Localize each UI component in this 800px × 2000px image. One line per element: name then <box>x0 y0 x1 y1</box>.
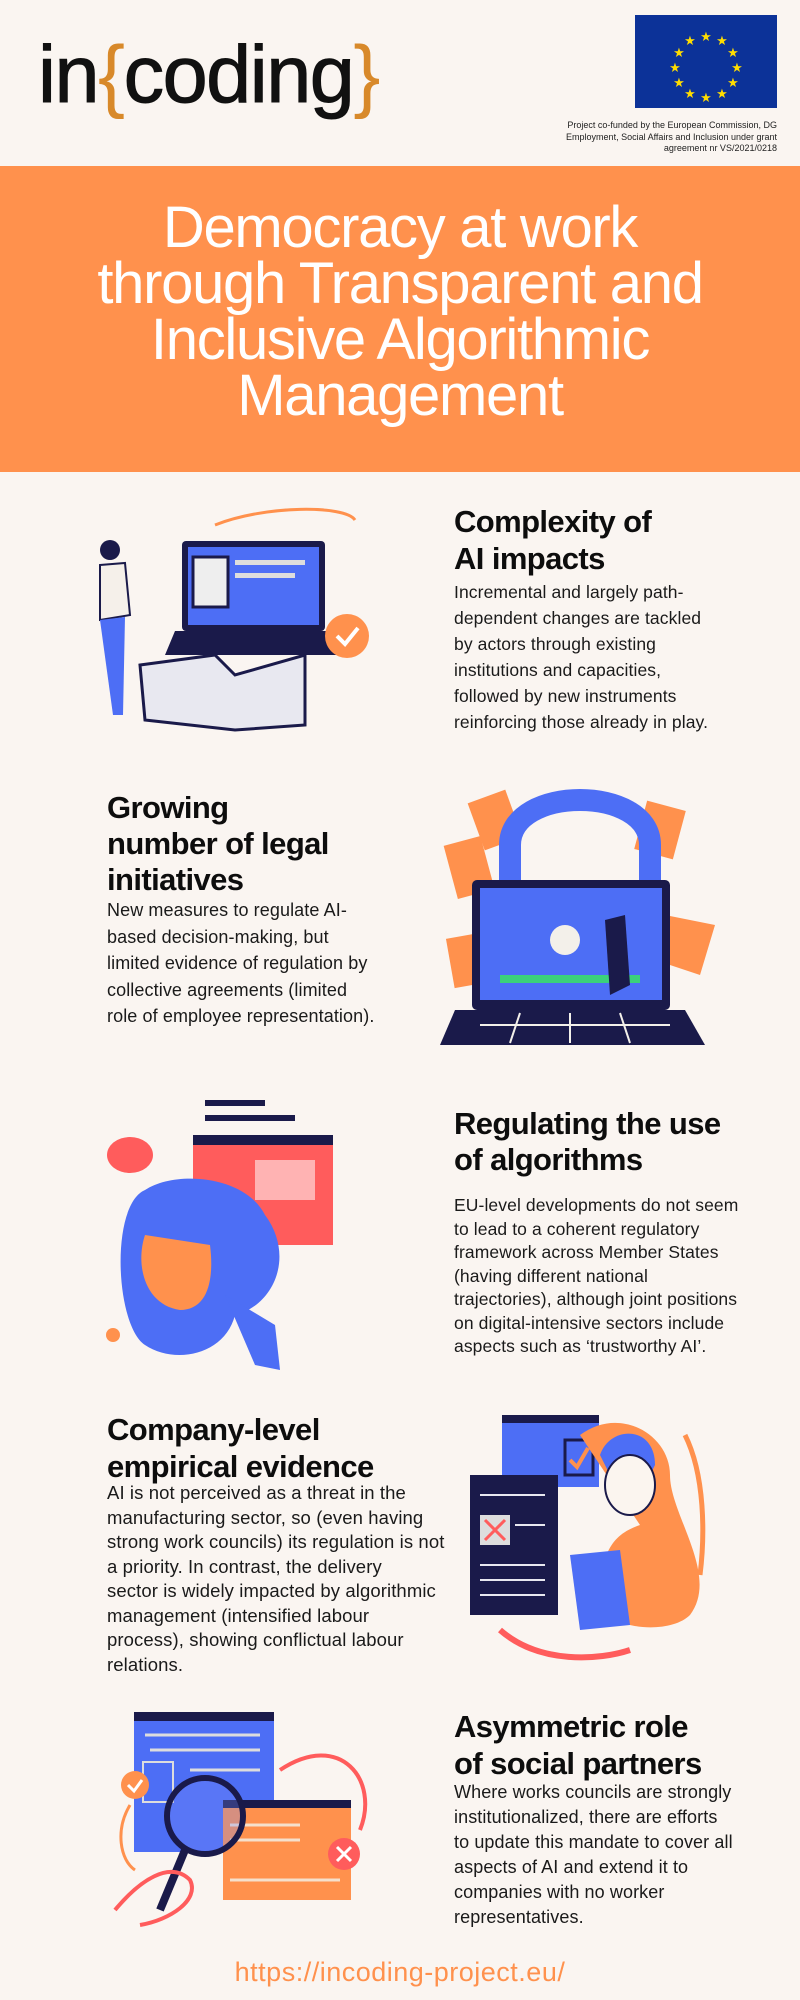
text block <box>454 1195 738 1356</box>
text block: aspects such as ‘trustworthy AI’. <box>454 1336 706 1356</box>
heading: Company-level <box>107 1412 320 1447</box>
title: Inclusive Algorithmic <box>151 307 649 372</box>
icon: EU flag: ★ <box>700 91 712 106</box>
text block: to update this mandate to cover all <box>454 1832 733 1852</box>
icon: EU flag: ★ <box>669 61 681 76</box>
illustration: padlock laptop <box>440 789 715 1045</box>
heading: Growing <box>107 790 229 825</box>
heading: of social partners <box>454 1746 702 1781</box>
icon: EU flag: ★ <box>684 34 696 49</box>
header <box>0 0 800 166</box>
text block: aspects of AI and extend it to <box>454 1857 688 1877</box>
text block: management (intensified labour <box>107 1604 369 1626</box>
heading <box>454 1106 721 1177</box>
text block: institutions and capacities, <box>454 660 661 680</box>
title <box>97 195 703 428</box>
text block: limited evidence of regulation by <box>107 953 367 973</box>
panel: legal initiatives <box>107 789 715 1045</box>
text block: reinforcing those already in play. <box>454 712 708 732</box>
icon: EU flag: ★ <box>716 87 728 102</box>
panel: regulating algorithms <box>106 1100 738 1370</box>
text block: institutionalized, there are efforts <box>454 1807 717 1827</box>
title banner <box>0 166 800 472</box>
text block: framework across Member States <box>454 1242 719 1262</box>
heading <box>107 1412 374 1484</box>
icon: EU flag: ★ <box>731 61 743 76</box>
heading <box>454 504 652 576</box>
text block: companies with no worker <box>454 1882 664 1902</box>
text block <box>107 1482 444 1674</box>
text block: New measures to regulate AI- <box>107 900 347 920</box>
heading <box>454 1709 702 1781</box>
text block: dependent changes are tackled <box>454 608 701 628</box>
footer url: https://incoding-project.eu/ <box>235 1957 565 1987</box>
illustration: woman with documents <box>470 1415 706 1660</box>
icon: EU flag: ★ <box>684 87 696 102</box>
logo: in{coding} <box>38 30 379 120</box>
heading: number of legal <box>107 826 329 861</box>
heading: initiatives <box>107 862 243 897</box>
illustration: woman with browser <box>106 1100 333 1370</box>
text block <box>454 582 708 732</box>
panel: company-level evidence <box>107 1412 706 1674</box>
text block: by actors through existing <box>454 634 656 654</box>
icon: EU flag: ★ <box>673 46 685 61</box>
text block: manufacturing sector, so (even having <box>107 1506 423 1528</box>
text block: EU-level developments do not seem <box>454 1195 738 1215</box>
text block: trajectories), although joint positions <box>454 1289 737 1309</box>
icon: EU flag: ★ <box>673 76 685 91</box>
text block: on digital-intensive sectors include <box>454 1312 724 1332</box>
heading: AI impacts <box>454 541 605 576</box>
text block: strong work councils) its regulation is not <box>107 1531 444 1552</box>
icon: EU flag: ★ <box>700 30 712 45</box>
title: Democracy at work <box>163 195 637 260</box>
panel: complexity <box>99 504 708 732</box>
title: Management <box>237 363 563 428</box>
text block: to lead to a coherent regulatory <box>454 1218 699 1238</box>
text block: collective agreements (limited <box>107 980 347 1000</box>
heading: Asymmetric role <box>454 1709 688 1744</box>
text block: sector is widely impacted by algorithmic <box>107 1580 436 1601</box>
heading: Complexity of <box>454 504 651 539</box>
heading <box>107 790 329 897</box>
panel: social partners <box>114 1709 733 1927</box>
text block <box>107 900 374 1026</box>
text block: process), showing conflictual labour <box>107 1629 404 1650</box>
icon: EU flag <box>635 15 777 108</box>
text block: Incremental and largely path- <box>454 582 684 602</box>
text block: followed by new instruments <box>454 686 677 706</box>
heading: of algorithms <box>454 1142 643 1177</box>
icon: EU flag: ★ <box>727 76 739 91</box>
illustration: magnifier over browsers <box>114 1712 368 1927</box>
text block: AI is not perceived as a threat in the <box>107 1482 406 1503</box>
heading: Regulating the use <box>454 1106 721 1141</box>
text block <box>454 1782 733 1927</box>
text block: Where works councils are strongly <box>454 1782 731 1802</box>
text block: (having different national <box>454 1266 648 1286</box>
caption: funding: Project co-funded by the European Commission, DG Employment, Social Affairs and Inclusion under grant agreement nr VS/2021/0218 <box>566 120 777 153</box>
text block: based decision-making, but <box>107 926 329 946</box>
text block: relations. <box>107 1654 183 1674</box>
illustration: laptop with person <box>99 508 369 732</box>
heading: empirical evidence <box>107 1449 374 1484</box>
text block: a priority. In contrast, the delivery <box>107 1556 382 1576</box>
icon: EU flag: ★ <box>716 34 728 49</box>
icon: EU flag: ★ <box>727 46 739 61</box>
title: through Transparent and <box>97 251 703 316</box>
text block: role of employee representation). <box>107 1006 374 1026</box>
text block: representatives. <box>454 1907 584 1927</box>
